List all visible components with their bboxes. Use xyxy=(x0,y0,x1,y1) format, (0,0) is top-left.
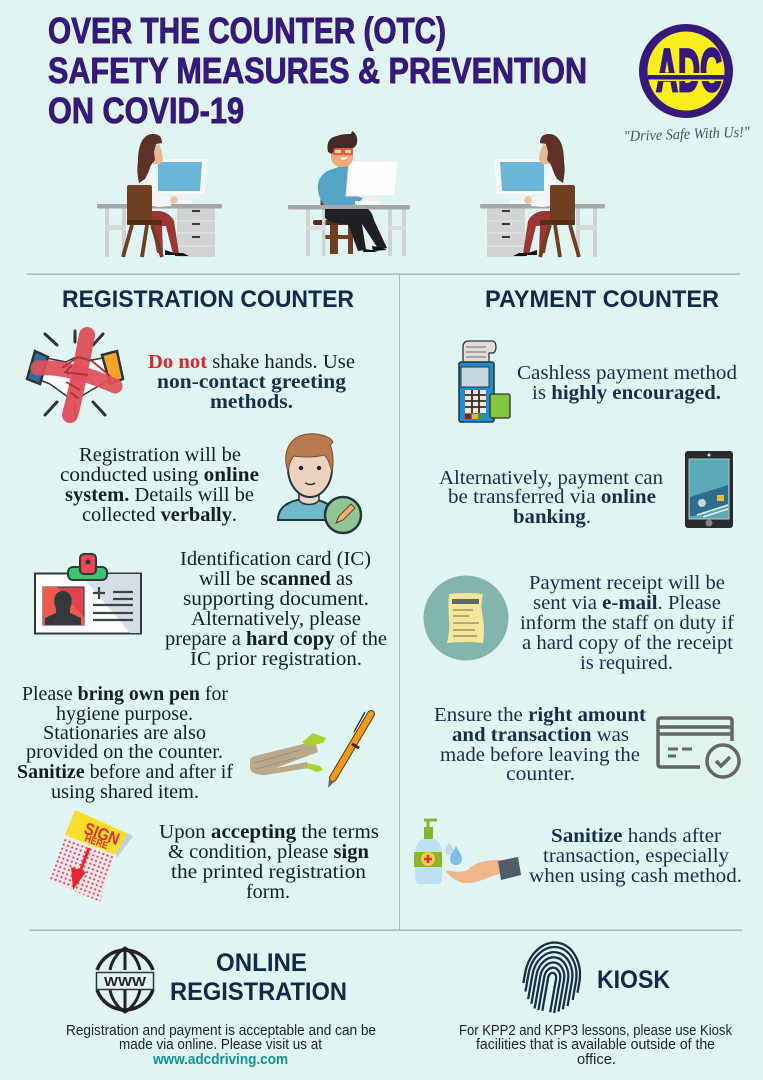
heading: kiosk: KIOSK xyxy=(597,966,670,994)
top divider xyxy=(27,274,740,275)
text: online description: made via online. Please visit us at xyxy=(119,1037,322,1053)
text: identification card: Alternatively, please xyxy=(191,609,361,630)
text: online banking: be transferred via online xyxy=(448,487,656,508)
text: do not shake hands: Do not shake hands. Use xyxy=(148,352,355,373)
icon: www globe: WWW xyxy=(104,974,147,989)
text: online system: system. Details will be xyxy=(65,485,254,506)
icon: identification card xyxy=(35,554,141,634)
text: bring own pen: provided on the counter. xyxy=(26,742,223,763)
icon: sign here: SIGN xyxy=(82,819,122,849)
heading: online registration: REGISTRATION xyxy=(170,978,347,1006)
text: identification card: will be scanned as xyxy=(199,569,353,590)
text: do not shake hands: methods. xyxy=(210,392,293,413)
text: online banking: Alternatively, payment can xyxy=(439,468,663,489)
text: accepting terms: the printed registration xyxy=(171,862,366,883)
text: online description: www.adcdriving.com xyxy=(152,1052,288,1068)
text: online banking: banking. xyxy=(513,507,591,528)
text: receipt by e-mail: inform the staff on duty if xyxy=(520,613,735,634)
text: accepting terms: form. xyxy=(246,882,290,903)
title: SAFETY MEASURES & PREVENTION xyxy=(48,50,587,91)
panel: registration counter xyxy=(17,286,387,903)
text: identification card: prepare a hard copy of the xyxy=(165,629,387,650)
text: receipt by e-mail: is required. xyxy=(580,653,673,674)
icon: stapler xyxy=(250,733,326,775)
text: receipt by e-mail: a hard copy of the receipt xyxy=(522,633,734,654)
title xyxy=(48,10,587,131)
text: online system: collected verbally. xyxy=(82,505,237,526)
text: cashless: Cashless payment method xyxy=(517,363,737,384)
title: OVER THE COUNTER (OTC) xyxy=(48,10,446,51)
text: right amount: and transaction was xyxy=(452,725,629,746)
text: do not shake hands: non-contact greeting xyxy=(157,372,346,393)
heading: online registration: ONLINE xyxy=(216,949,307,977)
text: receipt by e-mail: sent via e-mail. Please xyxy=(533,593,721,614)
panel: payment counter xyxy=(414,286,757,887)
text: bring own pen: Please bring own pen for xyxy=(22,684,229,705)
heading: online registration xyxy=(170,949,347,1006)
text: online description: Registration and payment is acceptable and can be xyxy=(66,1023,376,1039)
text: bring own pen xyxy=(17,684,234,803)
text: right amount: counter. xyxy=(506,764,575,785)
heading: payment counter: PAYMENT COUNTER xyxy=(485,286,719,313)
icon: person with pencil xyxy=(278,434,361,533)
text: kiosk description: For KPP2 and KPP3 lessons, please use Kiosk xyxy=(459,1023,733,1039)
logo tagline: "Drive Safe With Us!" xyxy=(624,125,751,145)
icon: receipt xyxy=(424,576,508,660)
text: identification card: Identification card (IC) xyxy=(180,549,371,570)
text: sanitize hands: when using cash method. xyxy=(529,866,742,887)
text: identification card: IC prior registration. xyxy=(190,649,362,670)
text: sanitize hands: transaction, especially xyxy=(543,846,729,867)
text: accepting terms: & condition, please sign xyxy=(168,842,369,863)
icon: tablet xyxy=(685,451,733,528)
text: bring own pen: using shared item. xyxy=(51,782,199,803)
icon: sign here: HERE xyxy=(83,833,110,852)
text: online system: Registration will be xyxy=(79,445,241,466)
panel: online registration xyxy=(66,948,376,1068)
text: right amount xyxy=(434,705,647,785)
column divider xyxy=(399,274,400,930)
text: online system: conducted using online xyxy=(60,465,259,486)
text: cashless: is highly encouraged. xyxy=(532,383,721,404)
text: do not shake hands xyxy=(148,352,355,413)
text: cashless xyxy=(517,363,737,404)
text: accepting terms xyxy=(159,822,379,903)
text: kiosk description: office. xyxy=(577,1052,616,1068)
text: identification card: supporting document. xyxy=(183,589,369,610)
text: accepting terms: Upon accepting the terms xyxy=(159,822,379,843)
text: online description xyxy=(66,1023,376,1068)
icon: sanitizer and hand xyxy=(414,820,521,884)
text: bring own pen: Sanitize before and after if xyxy=(17,762,234,783)
text: receipt by e-mail: Payment receipt will be xyxy=(529,573,725,594)
icon: sign here xyxy=(49,810,133,902)
text: sanitize hands: Sanitize hands after xyxy=(551,826,722,847)
illustration: woman at desk, right xyxy=(480,134,605,257)
text: bring own pen: Stationaries are also xyxy=(43,723,206,744)
text: kiosk description: facilities that is available outside of the xyxy=(476,1037,715,1053)
text: kiosk description xyxy=(459,1023,733,1068)
icon: card terminal xyxy=(459,341,510,422)
text: online banking xyxy=(439,468,663,528)
text: right amount: made before leaving the xyxy=(440,745,640,766)
text: online system xyxy=(60,445,259,526)
icon: www globe xyxy=(96,948,154,1012)
icon: no handshake xyxy=(27,331,123,419)
panel: kiosk xyxy=(459,938,733,1068)
text: right amount: Ensure the right amount xyxy=(434,705,647,726)
text: sanitize hands xyxy=(529,826,742,887)
heading: registration counter: REGISTRATION COUNTER xyxy=(62,286,354,313)
text: identification card xyxy=(165,549,387,670)
text: receipt by e-mail xyxy=(520,573,735,674)
text: bring own pen: hygiene purpose. xyxy=(56,704,193,725)
icon: pen xyxy=(328,712,371,788)
title: ON COVID-19 xyxy=(48,90,244,131)
logo: ADC xyxy=(639,24,733,118)
icon: fingerprint xyxy=(519,938,585,1016)
illustration: man at desk, centre xyxy=(288,131,410,256)
bottom divider xyxy=(29,930,742,931)
illustration: woman at desk, left xyxy=(97,134,222,257)
icon: card with check xyxy=(640,690,757,808)
